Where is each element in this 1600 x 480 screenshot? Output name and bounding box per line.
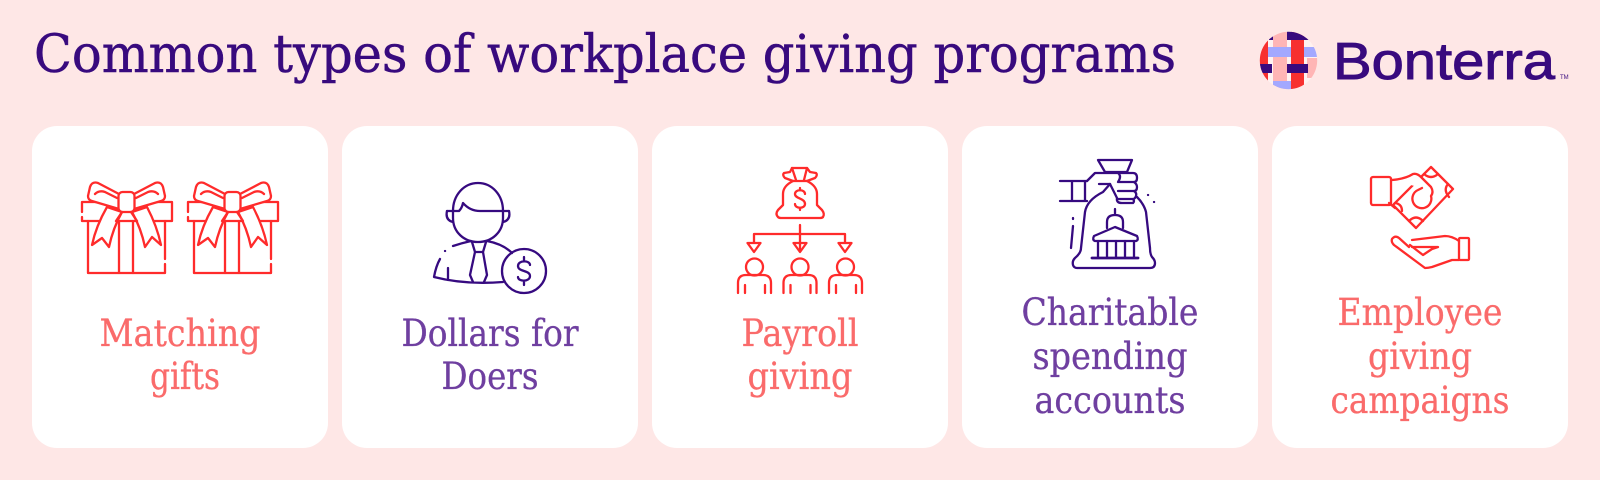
label: Matching gifts: gifts (150, 355, 220, 398)
label: Employee giving campaigns: campaigns (1330, 379, 1510, 422)
icon: hand passing money to hand (1371, 167, 1469, 268)
panel: Payroll giving (652, 126, 948, 448)
panel: Charitable spending accounts (962, 126, 1258, 448)
label: Payroll giving (742, 312, 858, 398)
title: Common types of workplace giving programs (34, 25, 1176, 85)
label: Payroll giving: giving (748, 355, 852, 398)
icon: two gift boxes (82, 182, 278, 273)
label: Payroll giving: Payroll (742, 312, 858, 355)
icon: woven circle mark (1259, 31, 1319, 91)
panel: Dollars for Doers (342, 126, 638, 448)
label: Charitable spending accounts: accounts (1034, 379, 1186, 422)
icon: person with dollar coin (434, 183, 546, 293)
label: Employee giving campaigns (1330, 291, 1510, 422)
label: Charitable spending accounts: spending (1032, 335, 1188, 378)
icon: hand holding bag with bank (1060, 160, 1155, 268)
panel: Employee giving campaigns (1272, 126, 1568, 448)
panel: Matching gifts (32, 126, 328, 448)
label: Dollars for Doers: Dollars for (402, 312, 579, 355)
logo: Bonterra (1259, 31, 1569, 91)
label: Charitable spending accounts (1022, 291, 1198, 422)
icon: gift right (188, 182, 278, 273)
label: Employee giving campaigns: Employee (1338, 291, 1502, 334)
label: Dollars for Doers (402, 312, 579, 398)
icon: gift left (82, 182, 172, 273)
icon: money bag to three people (738, 168, 862, 293)
label: Charitable spending accounts: Charitable (1022, 291, 1198, 334)
label: Employee giving campaigns: giving (1368, 335, 1472, 378)
label: Dollars for Doers: Doers (442, 355, 538, 398)
label: Matching gifts: Matching (100, 312, 260, 355)
trademark: TM (1560, 75, 1569, 81)
label: Matching gifts (100, 312, 260, 398)
logo wordmark: Bonterra (1333, 33, 1555, 91)
